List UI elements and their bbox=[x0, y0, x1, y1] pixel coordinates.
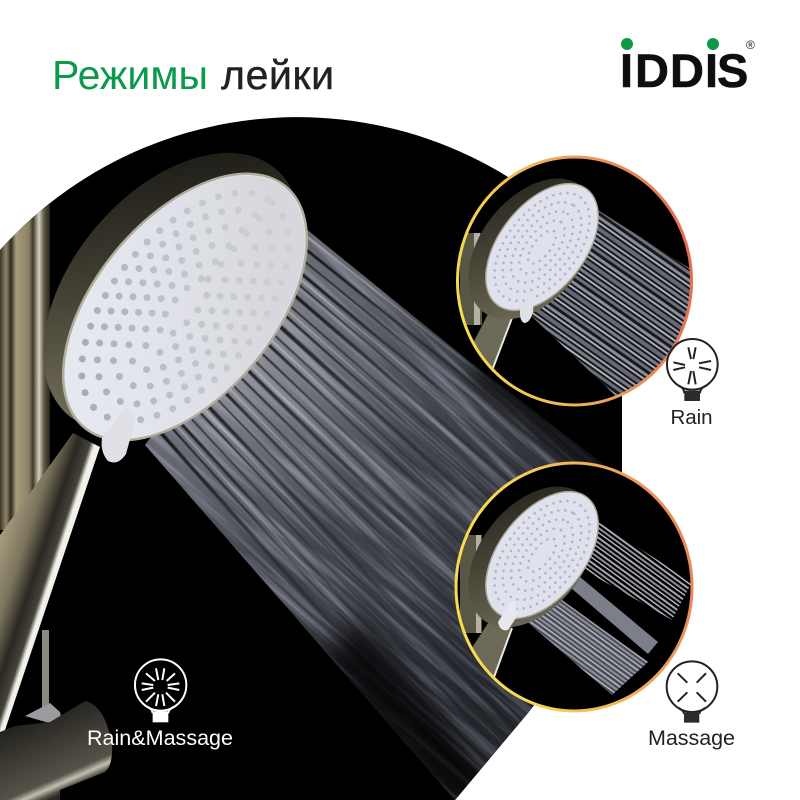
handle bbox=[0, 433, 100, 745]
water spray bbox=[145, 230, 606, 800]
rain head bbox=[468, 178, 599, 320]
white selector nub bbox=[102, 407, 135, 462]
logo: IDDIS: ® bbox=[746, 38, 755, 52]
rain nub bbox=[520, 296, 533, 323]
rain handle bbox=[474, 314, 510, 367]
face water wash bbox=[106, 176, 305, 423]
main photo: shower head in black shape bbox=[0, 117, 622, 800]
logo: IDDIS: IDDIS bbox=[620, 44, 748, 97]
inset: Rain bbox=[443, 154, 700, 405]
massage rail bbox=[460, 535, 482, 633]
icon: massage bbox=[667, 661, 717, 723]
icon: rain bbox=[667, 339, 718, 401]
wall rail pipes bbox=[0, 200, 50, 715]
upper edge shadow bbox=[480, 360, 630, 475]
label: Massage: Massage bbox=[648, 726, 735, 750]
wall bracket bbox=[0, 701, 112, 800]
label: Rain&Massage: Rain&Massage bbox=[87, 726, 233, 750]
icon: rain and massage bbox=[135, 659, 186, 722]
shower face bbox=[62, 172, 308, 442]
massage nub bbox=[498, 606, 516, 630]
massage rail highlight bbox=[476, 535, 481, 633]
label: Rain: Rain bbox=[670, 406, 712, 429]
rain spray bbox=[532, 210, 690, 396]
rain rail highlight bbox=[474, 233, 480, 325]
massage lower spray bbox=[525, 595, 648, 695]
massage handle bbox=[472, 623, 512, 676]
massage head bbox=[468, 486, 599, 628]
bracket clip bbox=[25, 703, 61, 722]
lower edge shadow bbox=[340, 640, 480, 800]
massage upper spray bbox=[585, 522, 690, 620]
title: лейки bbox=[221, 52, 334, 98]
inset: Massage bbox=[443, 462, 692, 711]
title: Режимы bbox=[52, 52, 208, 98]
rain rail bbox=[460, 233, 482, 325]
title bbox=[52, 52, 334, 98]
shower head housing bbox=[43, 153, 293, 420]
massage center jet bbox=[572, 577, 658, 654]
